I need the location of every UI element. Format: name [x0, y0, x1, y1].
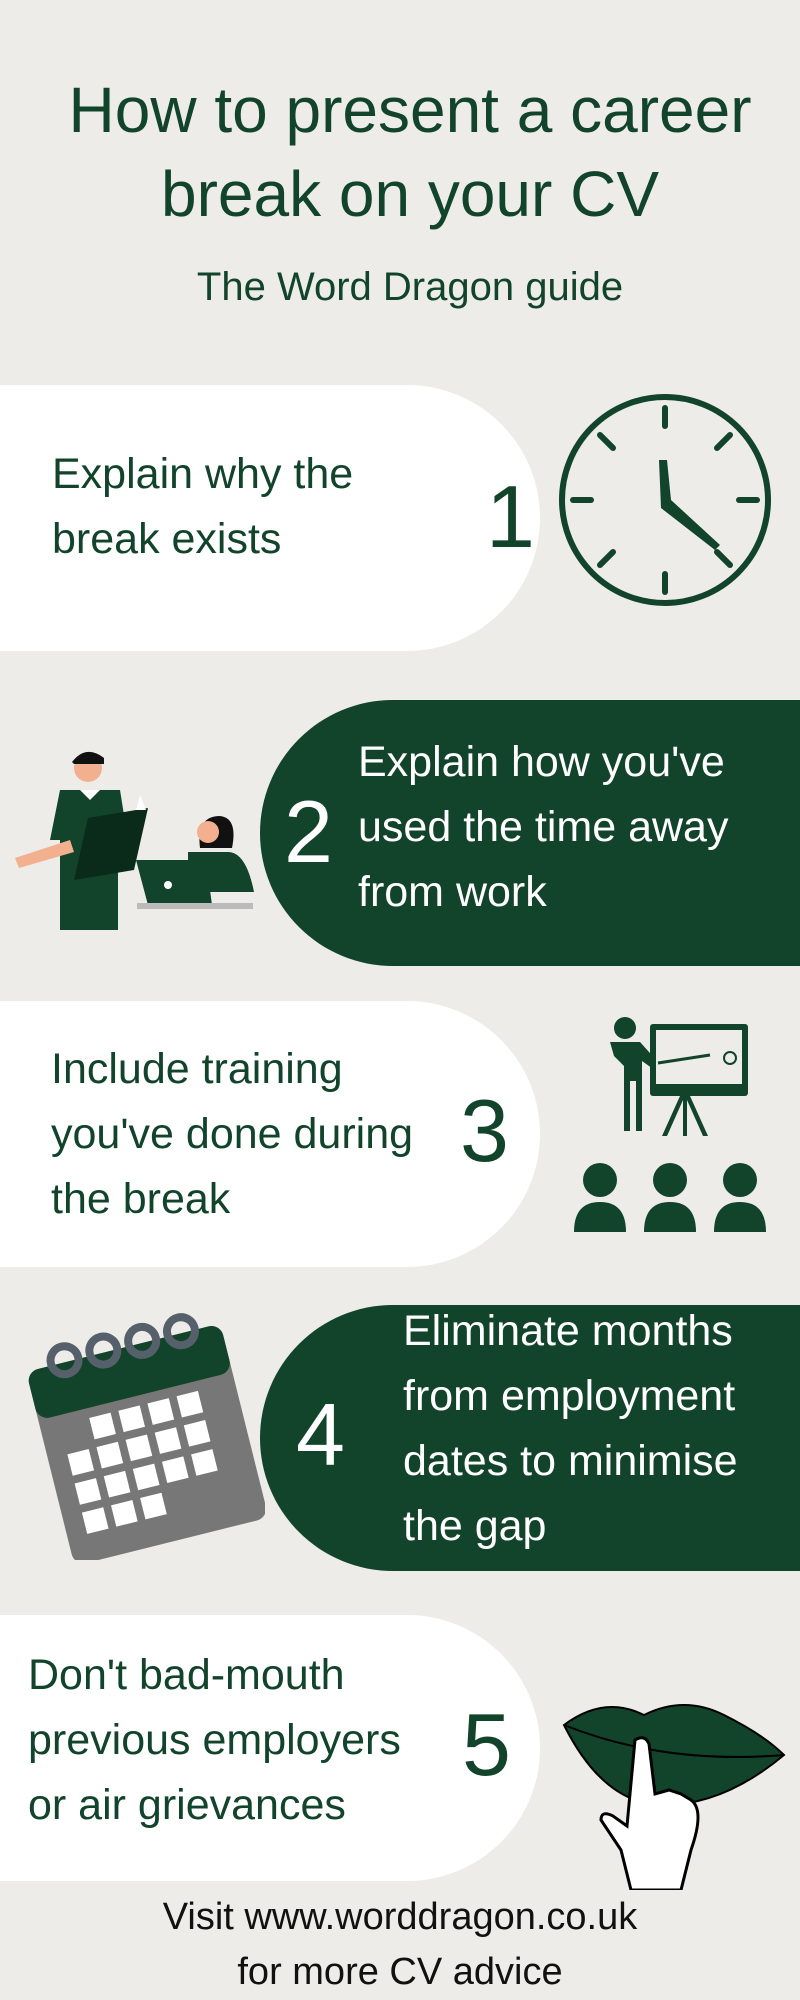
number 2: 2 [284, 782, 333, 881]
text 3 [51, 1045, 413, 1223]
icon: clock [559, 394, 771, 606]
text 4 [403, 1307, 738, 1550]
text 3: you've done during [51, 1110, 413, 1158]
panel 3 [0, 1001, 540, 1267]
text 3: Include training [51, 1045, 343, 1093]
text 4: the gap [403, 1502, 546, 1550]
title: break on your CV [161, 158, 659, 230]
text 2 [358, 738, 728, 916]
text 5: Don't bad-mouth [28, 1651, 345, 1699]
icon: calendar [28, 1313, 265, 1560]
icon: lips and finger [562, 1704, 786, 1890]
text 2: used the time away [358, 803, 728, 851]
text 1: break exists [52, 515, 281, 563]
text 2: from work [358, 868, 547, 916]
panel 5 [0, 1615, 540, 1881]
text 5 [28, 1651, 401, 1829]
subtitle: The Word Dragon guide [197, 265, 623, 309]
title [68, 74, 752, 230]
footer [163, 1896, 638, 1993]
number 3: 3 [460, 1081, 509, 1180]
text 5: or air grievances [28, 1781, 346, 1829]
text 4: from employment [403, 1372, 735, 1420]
text 1 [52, 450, 353, 563]
icon: presentation [574, 1017, 766, 1232]
footer: Visit www.worddragon.co.uk [163, 1896, 637, 1938]
text 3: the break [51, 1175, 230, 1223]
text 2: Explain how you've [358, 738, 725, 786]
panel 1 [0, 385, 540, 651]
text 4: dates to minimise [403, 1437, 738, 1485]
text 5: previous employers [28, 1716, 401, 1764]
panel 4 [260, 1305, 800, 1571]
title: How to present a career [68, 74, 752, 146]
panel 2 [260, 700, 800, 966]
number 1: 1 [486, 467, 535, 566]
footer: for more CV advice [237, 1951, 563, 1993]
illustration: people [15, 752, 254, 930]
text 4: Eliminate months [403, 1307, 733, 1355]
number 4: 4 [296, 1385, 345, 1484]
number 5: 5 [462, 1695, 511, 1794]
text 1: Explain why the [52, 450, 353, 498]
